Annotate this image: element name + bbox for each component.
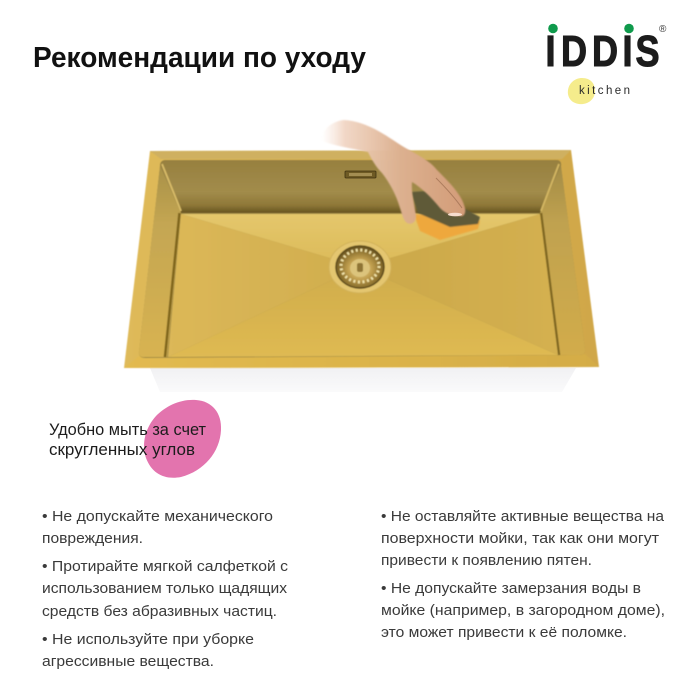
pink blob: [144, 400, 221, 478]
floor left facet: [168, 214, 360, 357]
right wall: [540, 166, 585, 355]
caption: [49, 421, 206, 459]
bullet 5: это может привести к её поломке.: [381, 624, 627, 641]
bullet 5: [381, 580, 665, 641]
bullet 2: [42, 558, 288, 620]
bullet 3: агрессивные вещества.: [42, 653, 214, 670]
bullet 1: [42, 508, 273, 547]
logo wordmark: I: [622, 27, 633, 76]
sink rim: [124, 150, 599, 368]
bullet 2: • Протирайте мягкой салфеткой с: [42, 558, 288, 575]
floor bottom facet: [168, 267, 558, 357]
bullet 1: повреждения.: [42, 530, 143, 547]
registered mark: ®: [659, 24, 667, 35]
logo wordmark: I: [546, 27, 556, 76]
bullet 4: [381, 508, 665, 569]
finger crease: [436, 178, 462, 208]
drain: [329, 241, 391, 293]
top rim: [150, 150, 571, 159]
bullet 2: использованием только щадящих: [42, 580, 287, 597]
sponge: [411, 191, 480, 240]
hand: [322, 120, 465, 224]
bullet 5: • Не допускайте замерзания воды в: [381, 580, 641, 597]
yellow blob: [568, 78, 595, 104]
floor top facet: [181, 214, 540, 267]
logo wordmark: D: [561, 27, 587, 76]
bullet 1: • Не допускайте механического: [42, 508, 273, 525]
sponge yellow body: [414, 214, 480, 240]
left dark crease: [165, 213, 180, 357]
left column list: [42, 508, 288, 670]
sink: [124, 120, 599, 392]
caption: скругленных углов: [49, 441, 195, 459]
floor right facet: [360, 214, 558, 355]
bullet 2: средств без абразивных частиц.: [42, 603, 277, 620]
bullet 3: [42, 631, 254, 670]
bullet 4: привести к появлению пятен.: [381, 552, 592, 569]
sink body: [124, 150, 599, 368]
caption: Удобно мыть за счет: [49, 421, 206, 439]
bowl opening: [139, 160, 585, 358]
bullet 5: мойке (например, в загородном доме),: [381, 602, 665, 619]
kitchen label: kitchen: [579, 85, 630, 97]
sponge dark top: [411, 191, 480, 227]
front rim highlight: [124, 354, 599, 368]
logo wordmark: D: [592, 27, 618, 76]
fingertip nail: [448, 213, 462, 216]
title: Рекомендации по уходу: [33, 42, 366, 74]
logo: IDDIS kitchen: [546, 24, 667, 104]
overflow slot: [345, 171, 376, 178]
logo wordmark: [546, 27, 660, 76]
under-sink shadow: [150, 368, 576, 392]
right corner crease: [541, 164, 559, 211]
right dark crease: [541, 213, 559, 355]
bullet 4: поверхности мойки, так как они могут: [381, 530, 659, 547]
right column list: [381, 508, 665, 641]
left wall: [139, 166, 181, 357]
bullet 4: • Не оставляйте активные вещества на: [381, 508, 665, 525]
logo wordmark: S: [636, 27, 660, 76]
back wall: [160, 160, 561, 213]
bullet 3: • Не используйте при уборке: [42, 631, 254, 648]
logo green dots: [548, 24, 634, 33]
left corner crease: [162, 164, 181, 211]
